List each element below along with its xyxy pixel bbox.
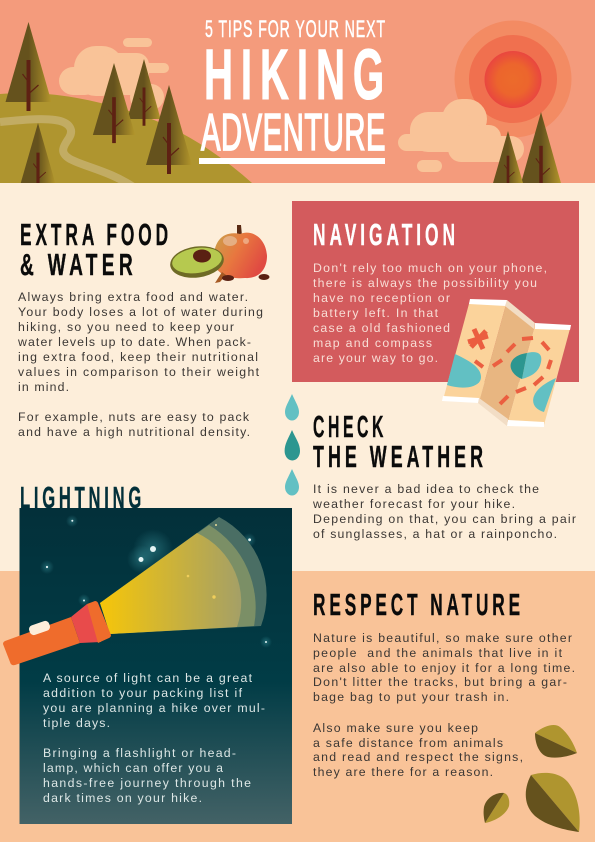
text block: respect nature: a safe distance from animals xyxy=(313,736,503,750)
text block: extra food and water xyxy=(17,290,263,439)
text block: extra food and water: Your body loses a lot of water during xyxy=(18,305,263,319)
heading: lightning: LIGHTNING xyxy=(20,480,145,515)
text block: navigation: there is always the possibility you xyxy=(313,276,537,290)
panel: check the weather xyxy=(312,409,576,541)
heading: extra food and water: & WATER xyxy=(20,247,137,282)
title xyxy=(199,16,392,164)
text block: respect nature xyxy=(313,631,575,779)
text block: navigation: have no reception or xyxy=(313,291,450,305)
text block: respect nature: are also able to enjoy it for a long time. xyxy=(313,661,575,675)
panel: extra food and water xyxy=(17,217,270,439)
title: ADVENTURE xyxy=(201,104,386,162)
icon: left trees xyxy=(6,22,192,192)
icon: leaves xyxy=(484,725,580,832)
text block: lightning: hands-free journey through the xyxy=(43,776,251,790)
panel: navigation xyxy=(292,201,579,427)
text block: extra food and water: Always bring extra food and water. xyxy=(18,290,248,304)
text block: respect nature: Also make sure you keep xyxy=(313,721,478,735)
icon: hill with trail xyxy=(0,93,252,188)
text block: navigation: Don't rely too much on your phone, xyxy=(313,261,547,275)
text block: navigation xyxy=(313,261,547,365)
text block: extra food and water: and have a high nutritional density. xyxy=(18,425,250,439)
icon: folded map xyxy=(442,299,571,427)
icon: water drops xyxy=(285,394,300,496)
text block: lightning: tiple days. xyxy=(43,716,110,730)
icon: sun xyxy=(454,20,572,138)
icon: apple and avocado xyxy=(168,225,270,283)
heading: check the weather xyxy=(313,409,487,474)
title: HIKING xyxy=(204,36,392,115)
icon: left cloud xyxy=(59,38,169,110)
heading: extra food and water xyxy=(20,217,172,282)
header banner xyxy=(0,0,595,183)
heading: navigation: NAVIGATION xyxy=(313,217,459,252)
icon: right cloud xyxy=(398,99,524,172)
text block: lightning: lamp, which can offer you a xyxy=(43,761,223,775)
text block: check the weather: of sunglasses, a hat or a rainponcho. xyxy=(313,527,557,541)
text block: navigation: case a old fashioned xyxy=(313,321,450,335)
text block: extra food and water: For example, nuts are easy to pack xyxy=(18,410,250,424)
heading: check the weather: CHECK xyxy=(313,409,387,444)
text block: extra food and water: hiking, so you need to keep your xyxy=(18,320,234,334)
panel: respect nature xyxy=(313,587,580,832)
text block: respect nature: Nature is beautiful, so make sure other xyxy=(313,631,572,645)
text block: lightning: Bringing a flashlight or head- xyxy=(43,746,236,760)
text block: lightning: dark times on your hike. xyxy=(43,791,202,805)
title: 5 TIPS FOR YOUR NEXT xyxy=(205,16,386,43)
icon: right trees xyxy=(493,112,561,191)
text block: extra food and water: ing extra food, keep their nutritional xyxy=(18,350,258,364)
icon: flashlight beam xyxy=(100,517,267,634)
text block: navigation: battery left. In that xyxy=(313,306,439,320)
text block: respect nature: and read and respect the signs, xyxy=(313,750,523,764)
text block: extra food and water: in mind. xyxy=(18,380,69,394)
panel: lightning xyxy=(3,508,292,824)
text block: check the weather xyxy=(312,482,576,541)
text block: lightning: addition to your packing list if xyxy=(43,686,243,700)
text block: check the weather: It is never a bad idea to check the xyxy=(313,482,539,496)
text block: check the weather: Depending on that, you can bring a pair xyxy=(313,512,576,526)
text block: lightning xyxy=(43,671,265,805)
text block: respect nature: Don't litter the tracks, but bring a gar- xyxy=(313,675,567,689)
text block: lightning: A source of light can be a great xyxy=(43,671,253,685)
text block: extra food and water: values in comparison to their weight xyxy=(18,365,260,379)
text block: navigation: map and compass xyxy=(313,336,432,350)
icon: flashlight xyxy=(3,601,111,665)
text block: navigation: are your way to go. xyxy=(313,351,438,365)
text block: respect nature: bage bag to put your trash in. xyxy=(313,690,509,704)
text block: respect nature: people and the animals that live in it xyxy=(313,646,563,660)
heading: extra food and water: EXTRA FOOD xyxy=(20,217,172,252)
stars xyxy=(40,515,272,648)
text block: lightning: you are planning a hike over mul- xyxy=(43,701,265,715)
text block: check the weather: weather forecast for your hike. xyxy=(312,497,515,511)
text block: extra food and water: water levels up to date. When pack- xyxy=(17,335,251,349)
text block: respect nature: they are there for a reason. xyxy=(313,765,493,779)
